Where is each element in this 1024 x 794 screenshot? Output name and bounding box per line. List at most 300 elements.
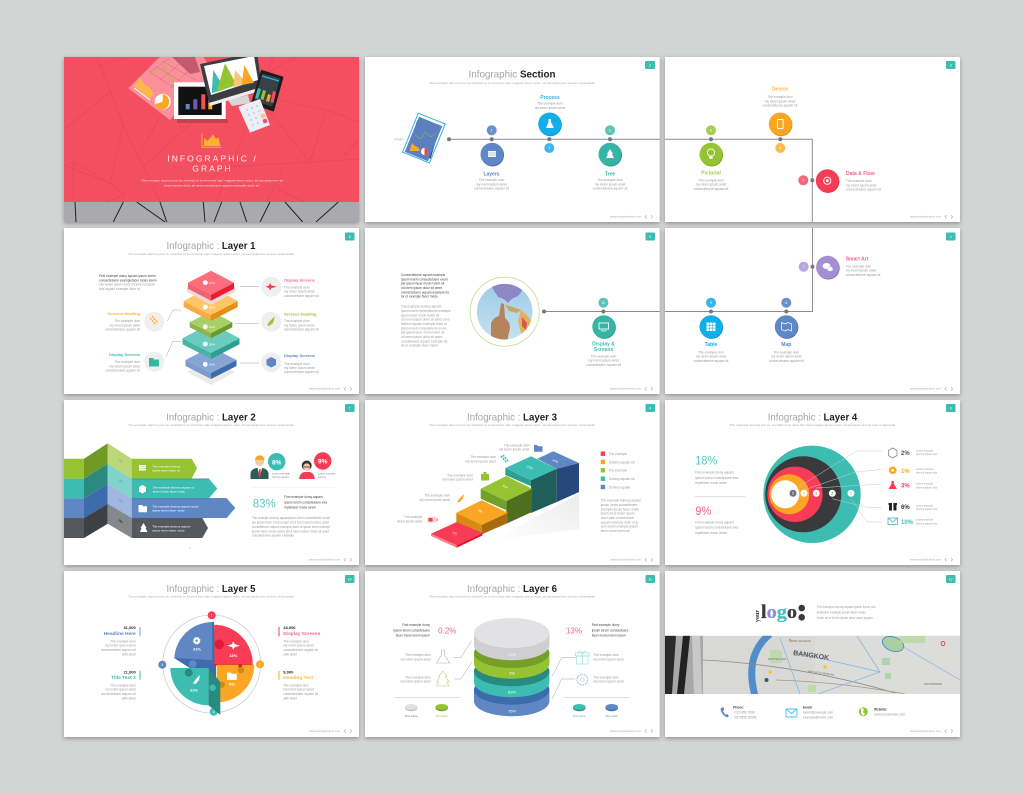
contact: phone: +66 5555 55555 [733, 716, 757, 720]
page badge: 8 [649, 406, 651, 410]
start label: START [394, 138, 404, 142]
stat: 83 percent: 83% [253, 496, 276, 510]
legend row: 6 percent: dummy aquam sito [916, 508, 938, 511]
stat: 9 percent: dummy [318, 475, 327, 479]
node: tree: Tree [605, 172, 615, 178]
nested circle chart: 2 [831, 492, 833, 496]
subtitle: The example dummy pos ra, simnihic to to nient har cian imagnis ipsum enim, sit accuprau rem at eum ut lamende [128, 252, 294, 256]
text block: about [817, 605, 876, 620]
callout: 9,000 heading: with amet [283, 696, 297, 700]
item: gear: my lorem ipsum amet [593, 680, 624, 684]
node: process: Process [540, 95, 560, 101]
band: teal [64, 464, 217, 498]
step labels: my lorem ipsum amet [499, 448, 529, 452]
item: screens heading right [261, 312, 319, 332]
layered diamond stack [182, 271, 240, 385]
nested circle chart: 1 [850, 492, 852, 496]
text block: description: lorem sit ut lorem ipsum [601, 512, 635, 516]
stat: 9 percent [314, 452, 336, 479]
callout: 9,000 heading: consectetuere aquam sit [283, 692, 318, 696]
icon: brush [457, 494, 464, 502]
panel: contact slide [665, 571, 960, 737]
node: tree [593, 125, 627, 191]
step labels: The example [404, 515, 423, 519]
panel: cover slide [64, 52, 359, 222]
item: screens heading right: my lorem ipsum amet [284, 323, 315, 327]
node: display and screens: 10 [602, 301, 605, 305]
node: map: my lorem ipsum amet [771, 355, 802, 359]
timeline line [665, 228, 812, 312]
person: man [250, 455, 268, 479]
node markers: 2 [259, 662, 261, 666]
step: red 1 percent [431, 522, 482, 548]
legend row: 2 percent: 2% [901, 451, 910, 457]
legend: grey oval [405, 704, 418, 718]
callout: 31,000 headline: 31,000 [123, 625, 136, 630]
item: display screens left: my lorem ipsum amet [110, 364, 140, 368]
percentage labels [203, 280, 215, 367]
text block: left bold [393, 623, 430, 638]
piece: blue 31 percent: 31% [193, 646, 201, 652]
text block: black intro [401, 273, 449, 299]
callout: 9,000 heading: Heading Text [283, 675, 313, 681]
node: pictorial [694, 125, 728, 191]
item: display screens right bottom: consectetuere aquam sit [284, 370, 319, 374]
stat: 18 percent: mplefacer modo lorem [695, 481, 727, 485]
legend row: 10 percent [888, 518, 938, 526]
step labels: The example dum [447, 473, 473, 477]
text block: left bold: ipsum lorem consetetuere [393, 628, 430, 632]
person: woman [299, 460, 315, 479]
callout: 31,000 headline: Headline Here [104, 631, 136, 637]
legend row: 6 percent: Lorem example [916, 504, 934, 508]
node: pictorial: consectetuere aquam sit [694, 187, 728, 191]
nested circle chart: 4 [803, 492, 805, 496]
text block: about: setetuere example ipsum facer modo [817, 610, 866, 614]
callout: 9,000 heading [278, 669, 318, 700]
photo: globe in circular frame [470, 277, 539, 346]
photo: city map of Bangkok: RATCHA ROAD [768, 658, 786, 661]
callout: 9,000 heading: my lorem ipsum amet [283, 688, 314, 692]
node markers: 4 [161, 663, 163, 667]
item: gear [577, 674, 624, 685]
item: tree: my lorem ipsum amet [400, 680, 431, 684]
node: device [763, 87, 797, 153]
item: display screens right top: Display Screens [284, 278, 316, 282]
legend: Dummy aquam sit [609, 460, 634, 464]
title: Infographic : Layer 6 [467, 583, 557, 595]
panel: layer 2 slide [64, 400, 359, 565]
legend row: 1 percent [889, 467, 938, 475]
layer: blue 76 percent: 76% [508, 708, 516, 714]
text block: bold: ipsum lorem consetetuere exa [284, 500, 327, 504]
node: data and flow: The example dum [846, 179, 872, 183]
contact: email [786, 705, 834, 720]
timeline line [544, 310, 660, 312]
isometric stair chart [431, 451, 579, 548]
node: process: my lorem ipsum amet [535, 106, 565, 110]
item: display screens right top: consectetuere aquam sit [284, 294, 319, 298]
legend row: 10 percent: Lorem example [916, 519, 934, 522]
item: display screens right bottom [261, 352, 319, 374]
text block: black intro: ut lorem ipsum dolor sit amet [401, 286, 442, 290]
icon: link [501, 455, 509, 463]
footer url and navigation: www.examplesname.com [309, 729, 341, 733]
item: display screens left: The example dum [114, 360, 140, 364]
node: display and screens [542, 298, 621, 367]
footer url and navigation [910, 558, 953, 562]
icon: area chart [202, 133, 221, 147]
legend row: 10 percent: dummy aquam sito [916, 523, 938, 526]
panel: layer 5 slide [64, 571, 359, 737]
connector arrows [166, 286, 259, 363]
band: teal: The example dummy aquam ut [153, 485, 194, 489]
icon: smartphone [252, 71, 283, 111]
legend row: 3 percent: 3% [901, 484, 910, 490]
step labels: lorem ipsum amet [397, 519, 422, 523]
logo: your [755, 610, 761, 622]
page badge: 12 [949, 577, 953, 581]
callout: 9,000 heading: The example dum [283, 683, 309, 687]
photo: city map of Bangkok: WONG SAI ROAD [790, 640, 811, 643]
icon: puzzle [481, 472, 489, 480]
node: smart art: my lorem ipsum amet [846, 269, 876, 273]
text block: description: facer modo lorem sit [601, 529, 630, 533]
step labels: The example dum [424, 494, 450, 498]
item: display screens left: consectetuere aquam sit [105, 369, 140, 373]
page badge: 10 [348, 577, 352, 581]
item: screens heading left: my lorem ipsum amet [110, 323, 140, 327]
subtitle: The example dummy pos ra, simnihic to to nient har cian imagnis ipsum enim, sit accuprau rem at eum ut lamende [429, 81, 595, 85]
panel: layer 3 slide [365, 400, 660, 565]
item: screens heading left [105, 311, 164, 332]
text block: grey body: ut lorem ipsum dolor sit amet cons [401, 318, 450, 322]
item: screens heading left: Screens Heading [108, 311, 141, 316]
layer: red [187, 271, 235, 305]
node: tree: consectetuere aquam sit [593, 187, 627, 191]
step labels: The example dum [470, 455, 496, 459]
legend: grey oval: Text Here [405, 714, 418, 718]
text block: grey [252, 516, 330, 537]
callout: 18,000 display: Display Screens [283, 631, 321, 637]
node: data and flow: consectetuere aquam sit [846, 188, 881, 192]
photo: city map of Bangkok: BANGKOK [793, 650, 830, 662]
stat: 18 percent: ipsum lorem consetetuere exa [695, 476, 738, 480]
text block: about: The example dummy aquam ipsum lorem con [817, 605, 876, 609]
legend row: 10 percent: 10% [901, 520, 914, 526]
node: display and screens: The example dum [591, 354, 617, 358]
text block: intro: olor lorem ipsum dolor sit amet consete- [99, 283, 156, 287]
step: teal 27 percent: 27% [526, 465, 534, 471]
item: display screens right top [261, 277, 319, 298]
text block: bold: mplefacer modo lorem [284, 505, 316, 509]
page badge: 4 [950, 235, 952, 239]
footer url and navigation [610, 729, 653, 733]
legend: teal oval [573, 704, 586, 718]
item: gift: my lorem ipsum amet [593, 657, 624, 661]
title: Infographic : Layer 5 [166, 583, 256, 595]
text block: bold [284, 495, 327, 509]
icon: paper with chart [128, 57, 213, 120]
item: flask [400, 650, 450, 663]
callout: 31,000 headline: The example dum [110, 639, 136, 643]
text block: description: dolor sate consetetuere [601, 516, 634, 520]
page marker: 1 [189, 546, 191, 550]
node: smart art [799, 256, 881, 280]
text block: cover description: lorem ipsum dolor sit amet consetuere aquam example dolor sit [164, 184, 259, 188]
stat: 9 percent: 9% [318, 459, 328, 466]
item: gear: The example dum [593, 675, 619, 679]
item: flask: my lorem ipsum amet [400, 657, 431, 661]
node: map: The example dum [774, 350, 799, 354]
node: device: The example dum [767, 95, 793, 99]
step: orange 6 percent: 6% [478, 508, 484, 514]
node markers: 3 [213, 710, 215, 714]
title: Infographic : Layer 2 [166, 412, 256, 424]
panel: globe slide [365, 228, 660, 394]
legend: blue oval: Text Here [605, 714, 618, 718]
step: green 11 percent [481, 476, 532, 524]
node: pictorial: Pictorial [701, 170, 721, 176]
piece: red 18 percent: 18% [229, 653, 238, 658]
step labels [397, 443, 530, 523]
contact: phone [721, 705, 757, 720]
footer url and navigation: www.examplesname.com [610, 729, 642, 733]
subtitle: The example dummy pos ra, simnihic to to nient har cian imagnis ipsum enim, sit accuprau rem at eum ut lamende [128, 423, 294, 427]
node: device: consectetuere aquam sit [763, 104, 797, 108]
node: smart art: Smart Art [846, 256, 869, 262]
icon: photo frame bar chart [174, 82, 228, 123]
timeline line [665, 139, 812, 222]
percentage labels: 30% [209, 305, 215, 309]
legend row: 2 percent: dummy aquam sito [916, 453, 938, 456]
node: process [535, 95, 565, 153]
page badge: 2 [649, 63, 651, 67]
item: display screens left: Display Screens [109, 352, 141, 357]
step labels: my lorem ipsum amet [420, 498, 450, 502]
node: data and flow [798, 169, 881, 193]
stat: 9 percent [695, 506, 738, 535]
page badge: 3 [950, 63, 952, 67]
text block: intro [99, 274, 157, 291]
step: blue 14 percent [537, 451, 579, 502]
text block: grey body: ipsum lorem consetetuere example [401, 309, 451, 313]
node: table [694, 298, 728, 363]
node: tree: my lorem ipsum amet [595, 182, 625, 186]
footer url and navigation [309, 387, 352, 391]
stat: 18 percent: 18% [695, 456, 717, 468]
item: screens heading right: The example dum [284, 319, 310, 323]
legend: The example [609, 469, 627, 473]
stat: 8 percent: dummy aquam [272, 475, 289, 479]
page badge [946, 61, 956, 69]
item: screens heading left: consectetuere aquam sit [105, 328, 140, 332]
text block: grey body: lor ut example facer modo [401, 343, 438, 347]
subtitle: The example dummy pos ra, simnihic to to nient har cian imagnis ipsum enim, sit accuprau rem at eum ut lamende [429, 423, 595, 427]
page badge: 11 [648, 577, 652, 581]
text block: right bold: ipsum lorem consetetuere [592, 628, 629, 632]
node: data and flow: Data & Flow [846, 171, 875, 177]
node: device: my lorem ipsum amet [765, 99, 795, 103]
layer: orange [184, 287, 238, 321]
footer url and navigation: www.examplesname.com [610, 558, 642, 562]
text block: description: ipsum lorem consetetuere [601, 503, 638, 507]
item: tree [400, 671, 449, 686]
callout: 18,000 display: consectetuere aquam sit [283, 648, 318, 652]
step: green 11 percent: 11% [502, 484, 509, 490]
legend row: 1 percent: Lorem example [916, 468, 934, 471]
step: red 1 percent: 1% [452, 530, 458, 536]
leader lines [793, 451, 882, 522]
step labels: The example dum [504, 443, 530, 447]
icon: monitor chart [200, 57, 260, 106]
text block: bold: First example dumy aquam [284, 495, 323, 499]
legend: teal oval: Text Here [573, 714, 586, 718]
text block: grey body: ipsum facer modo lorem sit [401, 313, 439, 317]
page badge [345, 232, 354, 240]
layer: green 3 percent: 3% [509, 670, 515, 676]
callout: 21,000 title: consectetuere aquam sit [101, 692, 136, 696]
icon: battery [428, 517, 438, 522]
node: map: consectetuere aquam sit [769, 359, 804, 363]
node: table: my lorem ipsum amet [696, 355, 726, 359]
panel: timeline end slide [665, 228, 960, 394]
band: blue: The example dummy aquam ipsum [152, 504, 200, 508]
legend: green oval [435, 704, 448, 718]
text block: grey body: ipsum lorem consetetuere exum [401, 326, 447, 330]
heading: cover title [167, 154, 256, 174]
item: tree: The example dum [405, 675, 431, 679]
text block: grey body: tetetum aquam example dolor ut [401, 322, 447, 326]
band: green: The example dummy [152, 464, 181, 468]
timeline line [449, 138, 660, 140]
legend row: 3 percent: dummy aquam sito [916, 486, 938, 489]
node: display and screens: Screens [594, 347, 613, 353]
piece: teal 21 percent: 21% [190, 688, 198, 692]
callout: 18,000 display [278, 625, 321, 656]
footer url and navigation [309, 729, 352, 733]
panel: layer 4 slide [665, 400, 960, 565]
text block: right bold: facer modo lorem ipsum [592, 634, 626, 638]
contact: website: Website: [874, 708, 887, 712]
node: display and screens: Display & [592, 342, 615, 348]
piece: orange 9 percent: 9% [229, 681, 235, 686]
node: layers: Layers [483, 172, 500, 178]
node markers [158, 611, 264, 716]
callout: 9,000 heading: 9,000 [283, 669, 294, 674]
page badge [646, 404, 655, 412]
legend row: 1 percent: dummy aquam sito [916, 472, 938, 475]
page badge [645, 61, 655, 69]
text block: grey body: ple ipsum facer modo lorem sit [401, 331, 445, 335]
node: display and screens: my lorem ipsum amet [588, 359, 619, 363]
contact: website [859, 707, 905, 717]
callout: 21,000 title: 21,000 [123, 669, 136, 674]
text block: left bold: First example dumy [402, 623, 430, 627]
panel: timeline continuation slide [665, 57, 960, 222]
node: smart art: consectetuere aquam sit [846, 273, 881, 277]
subtitle: The example dummy pos ra, simnihic to to nient har cian imagnis ipsum enim, sit accuprau rem at eum ut lamende [730, 423, 896, 427]
legend: Dummy aquam [609, 485, 631, 489]
title: Infographic : Layer 3 [467, 412, 557, 424]
page badge [946, 404, 956, 412]
footer url and navigation [910, 729, 953, 733]
icon: folder [534, 445, 542, 452]
text block: black intro: ipsum lorem consectetuere exum [401, 277, 448, 281]
node: process: 2 [548, 146, 550, 150]
footer url and navigation [610, 558, 653, 562]
stat: 18 percent [695, 456, 738, 485]
step labels: my lorem ipsum amet [466, 459, 496, 463]
page badge [646, 575, 655, 583]
text block: grey: ple ipsum facer modo lorem sit ut lorem ipsum dolor. amet [252, 520, 329, 524]
text block: description: aquam example dolor ut ip [601, 520, 638, 524]
puzzle circle chart [158, 611, 264, 716]
node: map: 8 [785, 301, 787, 305]
stat: 8 percent: 8% [272, 459, 282, 466]
percentage labels: 10% [209, 325, 215, 329]
band: dark grey: ipsum lorem facer modo [152, 528, 185, 532]
footer url and navigation: www.examplesname.com [910, 558, 942, 562]
stacked cylinder chart [474, 618, 549, 716]
item: screens heading left: The example dum [114, 319, 140, 323]
node: display and screens: consectetuere aquam sit [586, 363, 621, 367]
item: flask: The example dum [405, 653, 431, 657]
text block: black intro: consectetuere aquam example do [401, 290, 449, 294]
stat: 8 percent: Lorem example [272, 472, 290, 476]
contact: email: example@lorem.com [803, 716, 834, 720]
stat: 9 percent: Lorem example [318, 472, 336, 476]
legend: Dummy aquam sit [609, 477, 634, 481]
step labels: my lorem ipsum amet [442, 478, 473, 482]
node: tree: The example dum [597, 178, 623, 182]
contact: phone: +123 456 7890 [733, 710, 755, 714]
footer url and navigation [910, 387, 953, 391]
text block: description [601, 499, 641, 533]
node: layers [447, 125, 509, 191]
node: pictorial: my lorem ipsum amet [696, 183, 726, 187]
band: dark grey: 0% [118, 518, 124, 524]
node: smart art: 7 [803, 265, 805, 269]
item: screens heading right: Screens Heading [284, 312, 317, 316]
callout: 31,000 headline [101, 625, 140, 656]
legend row: 6 percent [888, 503, 938, 511]
text block: cover description: The example dummy pos ra, simnihic to to nient har cian imagnis ipsum enim, sit accuprau rem at [141, 178, 283, 182]
text block: grey body [401, 305, 451, 347]
node: layers: my lorem ipsum amet [476, 182, 507, 186]
band: teal: ipsum lorem facer modo [153, 490, 185, 494]
text block: grey: consetetuere aquam example [252, 533, 294, 537]
layer: blue [186, 347, 236, 379]
node: process: The example dum [537, 102, 563, 106]
stat: 9 percent: ipsum lorem consetetuere exa [695, 526, 738, 530]
layer: grey 12 percent: 12% [508, 652, 516, 657]
photo: city map of Bangkok: WAT RATCHABURANA [808, 670, 835, 677]
contact: email: Email: [803, 705, 813, 709]
footer url and navigation: www.examplesname.com [610, 215, 642, 219]
callout: 18,000 display: with amet [283, 652, 297, 656]
stat: 9 percent: 9% [695, 506, 711, 518]
callout: 18,000 display: The example dum [283, 639, 309, 643]
legend row: 2 percent: Lorem example [916, 450, 934, 452]
heading: cover title: GRAPH [192, 164, 231, 174]
title: Infographic : Layer 1 [166, 240, 256, 252]
item: display screens left [105, 352, 164, 373]
node: table: Table [705, 342, 718, 348]
page badge [345, 575, 354, 583]
page badge [946, 575, 956, 583]
text block: grey: ipsum facer modo lorem sit ut lorem ipsum dolor sit amet [252, 529, 329, 533]
